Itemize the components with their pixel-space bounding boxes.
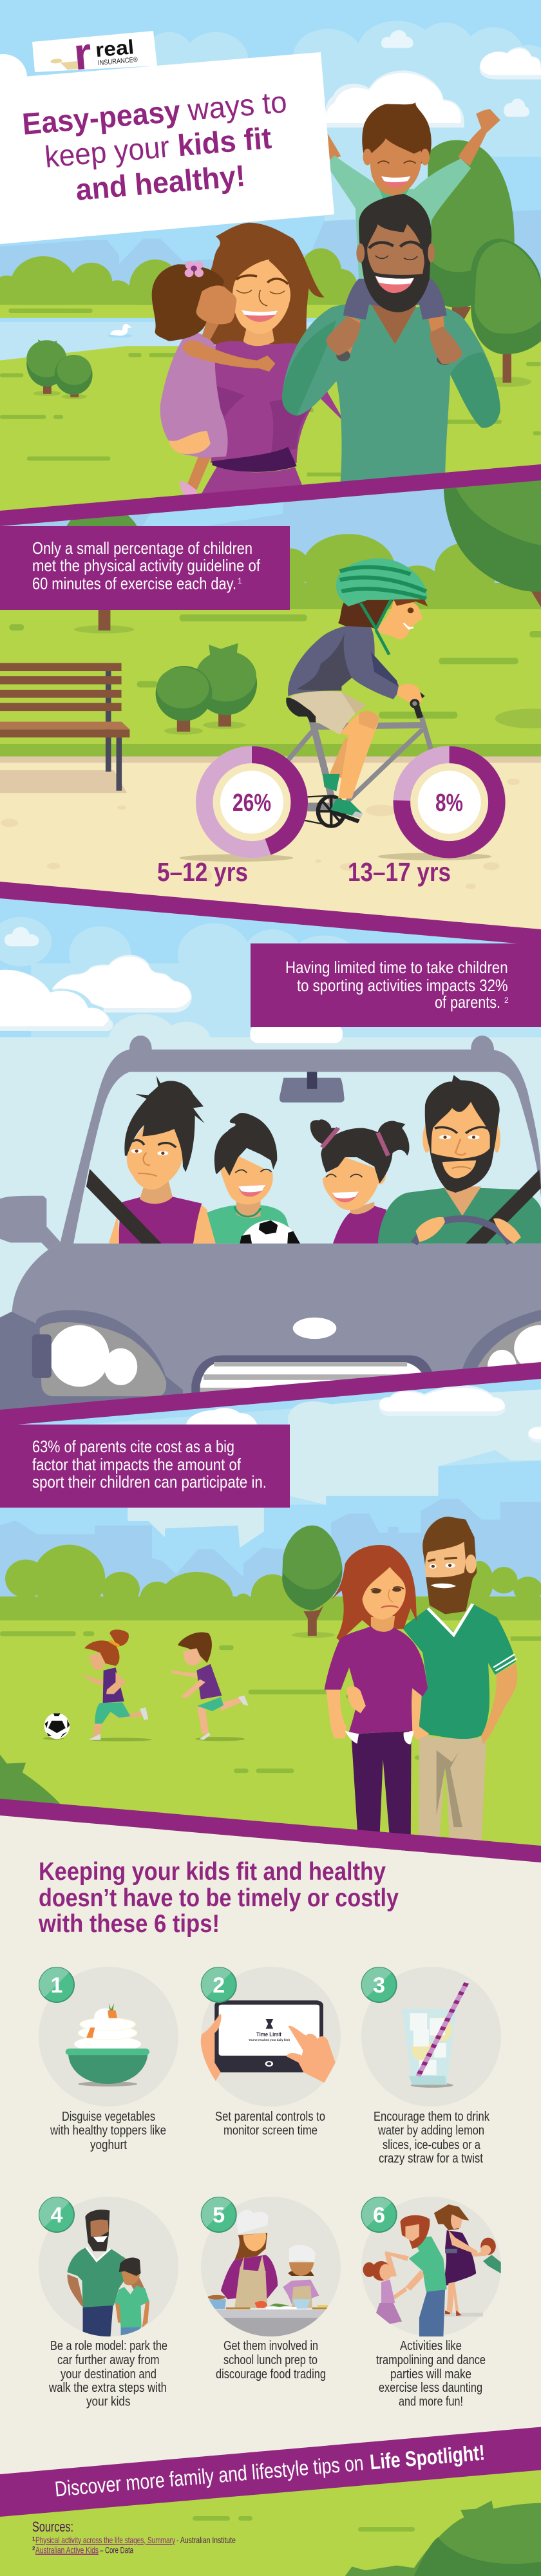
illustration: father and son [39, 2197, 178, 2338]
illustration: family dancing [361, 2197, 501, 2338]
panel: cycling park scene [0, 477, 541, 964]
tip 1 text [50, 2110, 166, 2152]
tip 3 text: crazy straw for a twist [379, 2152, 483, 2166]
bicycle [272, 715, 438, 807]
tip 4 text: your destination and [61, 2367, 157, 2382]
cyclist head and helmet [336, 558, 428, 655]
badge 1 [39, 1967, 74, 2002]
callout: physical activity: 1 [238, 576, 242, 585]
sources: 2 [32, 2546, 35, 2552]
hedges [0, 249, 420, 305]
woman hand [169, 431, 211, 454]
callout: physical activity: Only a small percentage of children [32, 538, 252, 558]
logo tag: INSURANCE® [97, 56, 138, 67]
callout: physical activity [0, 526, 290, 610]
banner: discover more: Life Spotlight! [369, 2440, 486, 2474]
city skyline [0, 210, 541, 285]
boy shorts and legs [336, 279, 452, 365]
tip 6 text: and more fun! [399, 2395, 463, 2409]
badge 2: 2 [213, 1973, 225, 1998]
tip 3 text: Encourage them to drink [374, 2110, 490, 2124]
tip 6 text: exercise less daunting [379, 2381, 482, 2395]
tip 1: disguise vegetables [39, 1967, 178, 2152]
boy shirt [326, 155, 471, 279]
girl legs [180, 457, 211, 495]
heading: tips [38, 1858, 399, 1938]
illustration: tablet: Time Limit [256, 2031, 282, 2038]
pale clouds [0, 917, 541, 1037]
grille [191, 1356, 435, 1425]
banner: discover more [0, 2427, 541, 2517]
callout: cost: sport their children can participate in. [32, 1472, 267, 1492]
callout: limited time: 2 [504, 996, 509, 1005]
tree [282, 1526, 343, 1638]
bench [0, 663, 129, 793]
tip 2 text: Set parental controls to [215, 2110, 325, 2124]
sources: 1 [32, 2536, 35, 2542]
woman head [233, 260, 291, 346]
callout: cost: factor that impacts the amount of [32, 1455, 242, 1474]
girl [310, 1119, 409, 1244]
callout: limited time: Having limited time to take children [285, 958, 508, 977]
illustration: glass of water [361, 1967, 501, 2107]
grass dashes [0, 1631, 541, 1773]
tree behind callout [66, 515, 137, 526]
tip 4 text: car further away from [57, 2353, 160, 2367]
man hands [326, 316, 462, 364]
bush bottom left [0, 1755, 61, 1804]
tip 3 text: slices, ice-cubes or a [383, 2138, 481, 2152]
badge 5: 5 [213, 2203, 225, 2228]
heading: tips: doesn’t have to be timely or costly [39, 1884, 399, 1912]
tip 5 text: Get them involved in [223, 2339, 318, 2353]
panel: hero family scene [0, 0, 541, 529]
callout: physical activity: 60 minutes of exercise each day. [32, 574, 236, 593]
running girl [83, 1629, 152, 1741]
badge 6 [362, 2197, 397, 2232]
handlebar and hand [397, 684, 422, 718]
grass [0, 1620, 541, 1880]
tip 4: role model [39, 2197, 178, 2409]
title text: Easy-peasy [21, 93, 182, 141]
section background: tips [0, 1815, 541, 2479]
heading: tips: with these 6 tips! [38, 1910, 220, 1938]
badge 1: 1 [51, 1973, 62, 1998]
tiny cloud [5, 927, 39, 946]
tip 6 text: Activities like [400, 2339, 462, 2353]
grass dashes [9, 614, 541, 719]
wheel shadows [180, 853, 491, 862]
pale clouds [0, 1390, 541, 1548]
tip 6 text: trampolining and dance [376, 2353, 486, 2367]
purple band 2 [0, 882, 541, 947]
hedges [0, 1545, 541, 1624]
tip 1 text: with healthy toppers like [50, 2124, 166, 2138]
sources [32, 2519, 236, 2555]
logo tag [32, 24, 157, 81]
cyclist [286, 625, 399, 818]
girl head [152, 261, 236, 341]
grass dashes [0, 308, 541, 477]
tip 2 text [215, 2110, 325, 2138]
rear view mirror [280, 1072, 345, 1103]
white clouds [186, 1385, 541, 1443]
tree top right [443, 477, 541, 607]
right headlight [462, 1310, 541, 1425]
chart: donut 5-12 years 26%: 26% [233, 790, 271, 817]
car badge [293, 1318, 336, 1339]
chart: donut 5-12 years 26% [196, 746, 308, 858]
bottom grass panel [0, 2468, 541, 2576]
purple band 4 [0, 1799, 541, 1862]
pebbles [1, 779, 520, 889]
boy [207, 1113, 293, 1244]
small cloud top right [480, 47, 541, 79]
sources: Physical activity across the life stages, Summary [35, 2535, 175, 2545]
lake [0, 318, 345, 361]
tip 3 text [374, 2110, 490, 2166]
badge 4: 4 [51, 2203, 63, 2228]
badge 5 [202, 2197, 236, 2232]
tip 6 text [376, 2339, 486, 2409]
tiny clouds [381, 30, 529, 117]
tip 6: activities [361, 2197, 501, 2409]
bush bottom right [345, 2501, 541, 2576]
tip 6 text: parties will make [390, 2367, 471, 2382]
tip 5: lunch prep [200, 2197, 341, 2382]
badge 4 [39, 2197, 74, 2232]
title white card [0, 52, 334, 244]
man [402, 1517, 517, 1880]
heading: tips: Keeping your kids fit and healthy [39, 1858, 386, 1886]
illustration: tablet [201, 1967, 341, 2107]
banner: discover more: Discover more family and lifestyle tips on [53, 2451, 365, 2501]
grass [0, 305, 541, 529]
logo tag: r [71, 28, 93, 79]
car body [0, 1036, 541, 1425]
boy head [362, 102, 432, 198]
callout: cost [0, 1425, 290, 1508]
tip 1 text: Disguise vegetables [62, 2110, 155, 2124]
duck [108, 324, 133, 337]
title text [21, 84, 288, 207]
label: 13-17 yrs: 13–17 yrs [348, 857, 451, 887]
label: 5-12 yrs: 5–12 yrs [157, 857, 248, 887]
man head [356, 194, 435, 312]
background clouds [145, 21, 541, 224]
girl arm [183, 340, 275, 372]
callout: cost: 63% of parents cite cost as a big [32, 1437, 234, 1456]
trees left [26, 339, 93, 399]
father [378, 1075, 541, 1244]
callout: limited time: of parents. [435, 992, 500, 1012]
shrubs [156, 643, 257, 735]
woman [325, 1545, 430, 1880]
illustration: mother and daughter cooking [200, 2197, 341, 2340]
purple band 1 [0, 464, 541, 526]
purple band 3 [0, 1362, 541, 1425]
tip 4 text: Be a role model: park the [50, 2339, 167, 2353]
soccer ball [240, 1220, 300, 1244]
logo tag: real [95, 35, 135, 61]
callout: limited time: to sporting activities impacts 32% [297, 976, 508, 995]
boy arms [326, 109, 500, 166]
panel: parents and kids in park [0, 1372, 541, 1880]
tip 5 text [216, 2339, 326, 2382]
illustration: tablet: You've reached your daily limit [249, 2038, 290, 2041]
trees right [428, 140, 541, 387]
windshield [73, 1072, 541, 1244]
tip 4 text [48, 2339, 167, 2409]
tip 5 text: discourage food trading [216, 2367, 326, 2382]
running boy [171, 1633, 249, 1741]
callout: physical activity: met the physical activity guideline of [32, 556, 261, 575]
left headlight [0, 1310, 183, 1425]
tip 2 text: monitor screen time [223, 2124, 318, 2138]
tip 1 text: yoghurt [90, 2138, 127, 2152]
sources: - Australian Institute [176, 2535, 236, 2545]
title text: and healthy! [74, 158, 247, 207]
mother [86, 1075, 216, 1244]
title text: keep your [43, 129, 171, 174]
girl dress [160, 332, 228, 458]
tip 5 text: school lunch prep to [223, 2353, 318, 2367]
side mirror [0, 1196, 61, 1249]
title text: ways to [185, 84, 288, 127]
soccer ball [43, 1713, 70, 1740]
woman body [202, 341, 341, 493]
sky window [143, 502, 283, 526]
hedges [269, 534, 541, 612]
chart: donut 13-17 years 8% [394, 746, 506, 858]
illustration: yoghurt bowl [39, 1967, 178, 2107]
white clouds left [0, 954, 192, 1031]
chart: donut 13-17 years 8%: 8% [435, 790, 463, 817]
woman hair back [207, 223, 325, 345]
white cloud right [325, 70, 464, 128]
tip 4 text: your kids [86, 2395, 130, 2409]
sources: Australian Active Kids [35, 2545, 99, 2555]
city skyline [0, 1499, 541, 1608]
tip 2: parental controls [201, 1967, 341, 2138]
tip 4 text: walk the extra steps with [48, 2381, 167, 2395]
man shirt [282, 298, 500, 490]
tip 3 text: water by adding lemon [377, 2124, 484, 2138]
badge 2 [202, 1967, 236, 2002]
sources: Sources: [32, 2519, 73, 2535]
title text: kids fit [176, 120, 273, 162]
badge 3 [362, 1967, 397, 2002]
callout: limited time [251, 943, 541, 1027]
panel: family in car scene [0, 895, 541, 1425]
ground [0, 609, 541, 964]
badge 3: 3 [373, 1973, 385, 1998]
title panel [0, 24, 334, 244]
badge 6: 6 [373, 2203, 385, 2228]
sources: – Core Data [100, 2545, 133, 2555]
tip 3: water [361, 1967, 501, 2166]
cloud behind title corner [0, 54, 27, 100]
